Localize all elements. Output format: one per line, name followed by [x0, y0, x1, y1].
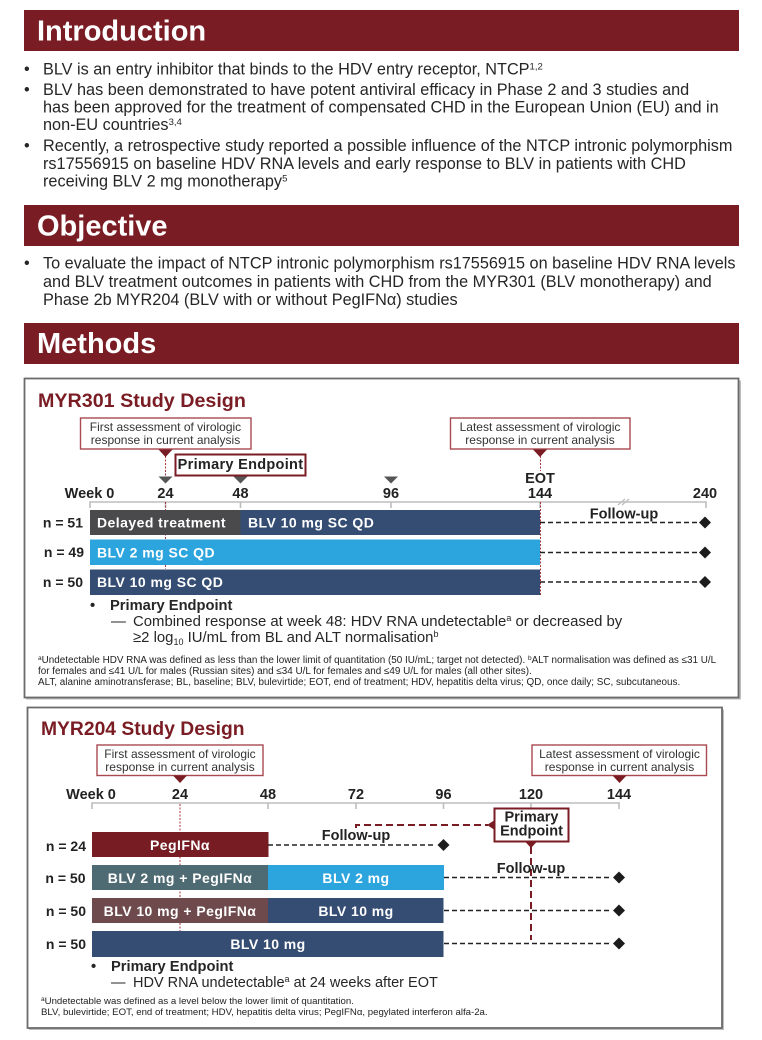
callout: first assessment: First assessment of virologic: [90, 420, 241, 434]
text block: primary endpoint: 10: [173, 637, 183, 647]
arm: n = 50, BLV 10 mg monotherapy: [46, 931, 625, 957]
timeline axis: [92, 803, 619, 809]
text block: objective: •: [24, 254, 30, 272]
week labels: 144: [607, 787, 631, 803]
footnotes: ALT normalisation was defined as ≤31 U/L: [532, 655, 717, 666]
week markers: 96: [383, 486, 399, 502]
callout: latest assessment: response in current analysis: [545, 760, 694, 774]
footnotes: a: [41, 996, 45, 1003]
arm: n = 50, BLV 10 mg: [46, 898, 625, 923]
text block: introduction bullets: 3,4: [169, 117, 182, 128]
heading: Introduction: [24, 10, 739, 51]
text block: introduction bullets: rs17556915 on baseline HDV RNA levels and early response to BLV in patients with CHD: [43, 155, 686, 173]
text block: introduction bullets: •: [24, 60, 30, 78]
dotted marker line: [179, 804, 181, 931]
text block: introduction bullets: non-EU countries: [43, 116, 169, 134]
week labels: 96: [435, 787, 452, 803]
arm: n = 24: [46, 832, 450, 857]
heading: Methods: [24, 323, 739, 364]
text block: introduction bullets: BLV has been demonstrated to have potent antiviral efficacy in Phase 2 and 3 studies and: [43, 81, 689, 99]
text block: primary endpoint: or decreased by: [511, 614, 623, 630]
text block: primary endpoint: —: [111, 614, 126, 630]
week markers: 240: [693, 486, 717, 502]
arm: n = 24: n = 24: [46, 838, 86, 854]
label: follow-up: Follow-up: [590, 506, 658, 522]
arm: n = 50: [43, 570, 711, 595]
week markers: EOT: [525, 471, 555, 487]
footnotes: [41, 996, 488, 1018]
text block: introduction bullets: 5: [282, 174, 287, 184]
text block: introduction bullets: [24, 60, 732, 190]
panel: MYR301 study design: [24, 378, 741, 700]
week labels: 48: [260, 787, 276, 803]
arm: n = 51: [43, 510, 711, 535]
arm: n = 51: Delayed treatment: [97, 514, 226, 530]
arm: n = 50, BLV 10 mg: n = 50: [46, 903, 86, 919]
text block: objective: To evaluate the impact of NTCP intronic polymorphism rs17556915 on baseline HDV RNA levels: [43, 254, 735, 272]
timeline axis: [90, 499, 706, 508]
text block: primary endpoint: IU/mL from BL and ALT normalisation: [183, 630, 433, 646]
footnotes: [38, 655, 717, 688]
title: MYR204 Study Design: MYR204 Study Design: [41, 719, 245, 740]
heading: Methods: Methods: [37, 328, 156, 360]
arm: n = 51: n = 51: [43, 514, 83, 530]
labels: follow-up: Follow-up: [497, 861, 565, 877]
footnotes: for females and ≤41 U/L for males (Russian sites) and ≤34 U/L for females and ≤49 U/L for males (all other sites).: [38, 666, 532, 677]
labels: follow-up: Follow-up: [322, 828, 390, 844]
arm: n = 50, BLV 2 mg: BLV 2 mg: [322, 870, 390, 886]
arm: n = 50, BLV 2 mg: [45, 865, 625, 890]
text block: primary endpoint: a: [285, 974, 290, 984]
arm: n = 50, BLV 10 mg: BLV 10 mg + PegIFNα: [104, 903, 256, 919]
footnotes: a: [38, 655, 42, 662]
callout: first assessment: First assessment of virologic: [104, 747, 256, 761]
footnotes: Undetectable was defined as a level below the lower limit of quantitation.: [45, 996, 354, 1007]
text block: introduction bullets: has been approved for the treatment of compensated CHD in the European Union (EU) and in: [43, 98, 719, 116]
text block: introduction bullets: 1,2: [530, 62, 543, 72]
callout: latest assessment: response in current analysis: [465, 433, 615, 447]
week labels: Week 0: [66, 787, 116, 803]
heading: Objective: [24, 205, 739, 246]
arm: n = 49: n = 49: [44, 544, 84, 560]
callout: first assessment: [80, 418, 251, 457]
text block: introduction bullets: receiving BLV 2 mg monotherapy: [43, 172, 282, 190]
arm: n = 50, BLV 2 mg: n = 50: [45, 870, 86, 886]
heading: Objective: Objective: [37, 210, 168, 242]
text block: primary endpoint: •: [90, 598, 95, 614]
callout: primary endpoint: [494, 808, 568, 842]
footnotes: ALT, alanine aminotransferase; BL, baseline; BLV, bulevirtide; EOT, end of treatment; HDV, hepatitis delta virus; QD, once daily; SC, subcutaneous.: [38, 677, 680, 688]
week markers: 144: [528, 486, 552, 502]
week labels: [66, 787, 631, 803]
text block: objective: and BLV treatment outcomes in patients with CHD from the MYR301 (BLV monotherapy) and: [43, 273, 712, 291]
arrow: primary endpoint dashed connectors: [356, 820, 537, 940]
text block: primary endpoint: b: [433, 629, 438, 639]
callout: first assessment: response in current analysis: [105, 760, 255, 774]
text block: primary endpoint: ≥2 log: [133, 630, 173, 646]
arm: n = 50, BLV 10 mg: BLV 10 mg: [318, 903, 394, 919]
text block: primary endpoint: Combined response at week 48: HDV RNA undetectable: [133, 614, 506, 630]
arm: n = 50, BLV 2 mg: BLV 2 mg + PegIFNα: [108, 870, 252, 886]
text block: introduction bullets: •: [24, 137, 30, 155]
text block: primary endpoint: HDV RNA undetectable: [133, 975, 285, 991]
text block: objective: Phase 2b MYR204 (BLV with or without PegIFNα) studies: [43, 291, 458, 309]
callout: first assessment: [97, 745, 263, 783]
text block: primary endpoint: [90, 598, 623, 647]
dotted marker lines: [166, 456, 540, 595]
footnotes: Undetectable HDV RNA was defined as less than the lower limit of quantitation (50 IU/mL; target not detected).: [42, 655, 528, 666]
labels: follow-up: [322, 828, 565, 877]
arm: n = 50: n = 50: [43, 574, 83, 590]
arm: n = 50, BLV 10 mg monotherapy: n = 50: [46, 936, 86, 952]
footnotes: b: [528, 655, 532, 662]
arm: n = 50, BLV 10 mg monotherapy: BLV 10 mg: [230, 936, 306, 952]
title: MYR301 Study Design: MYR301 Study Design: [38, 390, 246, 412]
callout: latest assessment: [450, 418, 630, 457]
text block: primary endpoint: •: [91, 959, 96, 975]
week labels: 120: [519, 787, 543, 803]
callout: primary endpoint: Primary: [504, 810, 559, 826]
text block: primary endpoint: —: [111, 975, 126, 991]
week labels: 24: [172, 787, 188, 803]
arm: n = 24: PegIFNα: [150, 837, 210, 853]
footnotes: BLV, bulevirtide; EOT, end of treatment; HDV, hepatitis delta virus; PegIFNα, pegylated interferon alfa-2a.: [41, 1007, 488, 1018]
callout: first assessment: response in current analysis: [91, 433, 240, 447]
heading: Introduction: Introduction: [37, 16, 206, 48]
arm: n = 51: BLV 10 mg SC QD: [248, 514, 374, 530]
callout: latest assessment: [532, 745, 706, 783]
text block: primary endpoint: a: [506, 613, 511, 623]
text block: primary endpoint: [91, 959, 438, 991]
week markers: Week 0: [65, 486, 114, 502]
text block: primary endpoint: Primary Endpoint: [111, 959, 234, 975]
text block: introduction bullets: BLV is an entry inhibitor that binds to the HDV entry receptor, NTCP: [43, 60, 530, 78]
callout: primary endpoint: Primary Endpoint: [178, 457, 303, 473]
week markers: [65, 471, 717, 502]
arm: n = 49: [44, 540, 711, 565]
text block: introduction bullets: •: [24, 81, 30, 99]
arm: n = 49: BLV 2 mg SC QD: [97, 544, 215, 560]
text block: introduction bullets: Recently, a retrospective study reported a possible influence of the NTCP intronic polymorphism: [43, 137, 732, 155]
arm: n = 50: BLV 10 mg SC QD: [97, 574, 223, 590]
week labels: 72: [348, 787, 364, 803]
week markers: 24: [157, 486, 174, 502]
callout: latest assessment: Latest assessment of virologic: [460, 420, 620, 434]
text block: primary endpoint: at 24 weeks after EOT: [290, 975, 438, 991]
callout: latest assessment: Latest assessment of virologic: [539, 747, 700, 761]
panel: MYR204 study design: [28, 708, 724, 1030]
week markers: 48: [232, 486, 249, 502]
text block: objective: [24, 254, 735, 309]
callout: primary endpoint: Endpoint: [500, 824, 563, 840]
text block: primary endpoint: Primary Endpoint: [110, 598, 233, 614]
